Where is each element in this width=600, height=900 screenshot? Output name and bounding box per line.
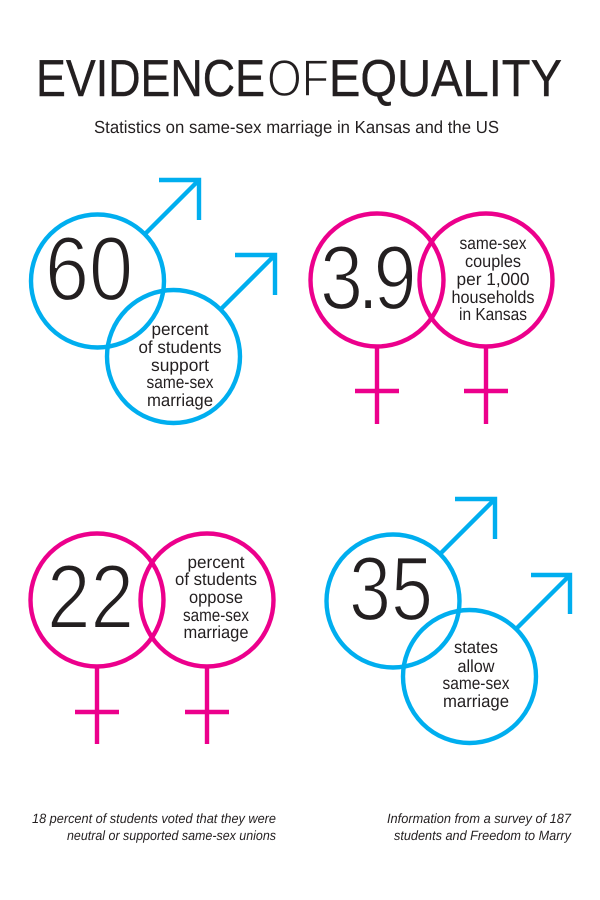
text: same-sex couples per 1,000 households in Kansas — [452, 233, 535, 324]
text: percent of students support same-sex marriage: marriage — [147, 390, 213, 410]
footnote: source: students and Freedom to Marry — [394, 828, 572, 843]
title: EQUALITY — [329, 50, 562, 108]
text: percent of students oppose same-sex marriage: percent — [188, 552, 245, 572]
text: states allow same-sex marriage: allow — [458, 656, 495, 676]
icon: female symbol four — [140, 534, 274, 744]
panel: 3.9 couples per 1,000 — [310, 214, 552, 424]
text: percent of students oppose same-sex marriage — [175, 552, 257, 642]
panel: 60 percent support — [31, 180, 275, 423]
panel: 35 states allow — [326, 499, 570, 743]
text: states allow same-sex marriage: same-sex — [442, 673, 510, 693]
icon: male symbol two — [107, 255, 275, 423]
subtitle: Statistics on same-sex marriage in Kansas and the US — [94, 117, 499, 137]
icon: female symbol one — [310, 214, 444, 424]
text: percent of students oppose same-sex marriage: of students — [175, 569, 257, 589]
title: OF — [267, 50, 329, 108]
footnote: source: Information from a survey of 187 — [387, 811, 571, 826]
text: percent of students oppose same-sex marriage: same-sex — [183, 605, 249, 625]
text: same-sex couples per 1,000 households in Kansas: same-sex — [460, 233, 527, 253]
text: percent of students oppose same-sex marriage: oppose — [189, 587, 243, 607]
icon: male symbol four — [403, 575, 570, 743]
number: 35: 35 — [349, 539, 433, 640]
text: states allow same-sex marriage: states — [454, 637, 498, 657]
icon: female symbol three — [30, 534, 164, 744]
text: same-sex couples per 1,000 households in Kansas: in Kansas — [459, 304, 527, 324]
footnote: neutral students: 18 percent of students voted that they were — [32, 811, 276, 826]
title — [36, 50, 562, 108]
text: states allow same-sex marriage: marriage — [443, 691, 509, 711]
number: 3.9: 3.9 — [320, 228, 417, 329]
number: 60: 60 — [45, 219, 133, 320]
text: same-sex couples per 1,000 households in Kansas: households — [452, 287, 535, 307]
text: percent of students support same-sex marriage — [138, 319, 222, 410]
icon: male symbol three — [326, 499, 495, 668]
text: states allow same-sex marriage — [442, 637, 510, 711]
footnote: source — [387, 811, 572, 843]
number: 22: 22 — [47, 547, 134, 648]
footnote: neutral students — [32, 811, 276, 843]
panel: 22 percent oppose — [30, 534, 274, 744]
text: same-sex couples per 1,000 households in Kansas: per 1,000 — [456, 269, 530, 289]
icon: female symbol two — [420, 214, 552, 424]
footnote: neutral students: neutral or supported same-sex unions — [67, 828, 276, 843]
text: percent of students support same-sex marriage: of students — [138, 337, 222, 357]
text: percent of students oppose same-sex marriage: marriage — [184, 622, 248, 642]
text: percent of students support same-sex marriage: support — [151, 355, 209, 375]
text: percent of students support same-sex marriage: percent — [152, 319, 209, 339]
text: percent of students support same-sex marriage: same-sex — [146, 372, 214, 392]
text: same-sex couples per 1,000 households in Kansas: couples — [465, 251, 521, 271]
icon: male symbol one — [31, 180, 199, 348]
title: EVIDENCE — [36, 50, 265, 108]
